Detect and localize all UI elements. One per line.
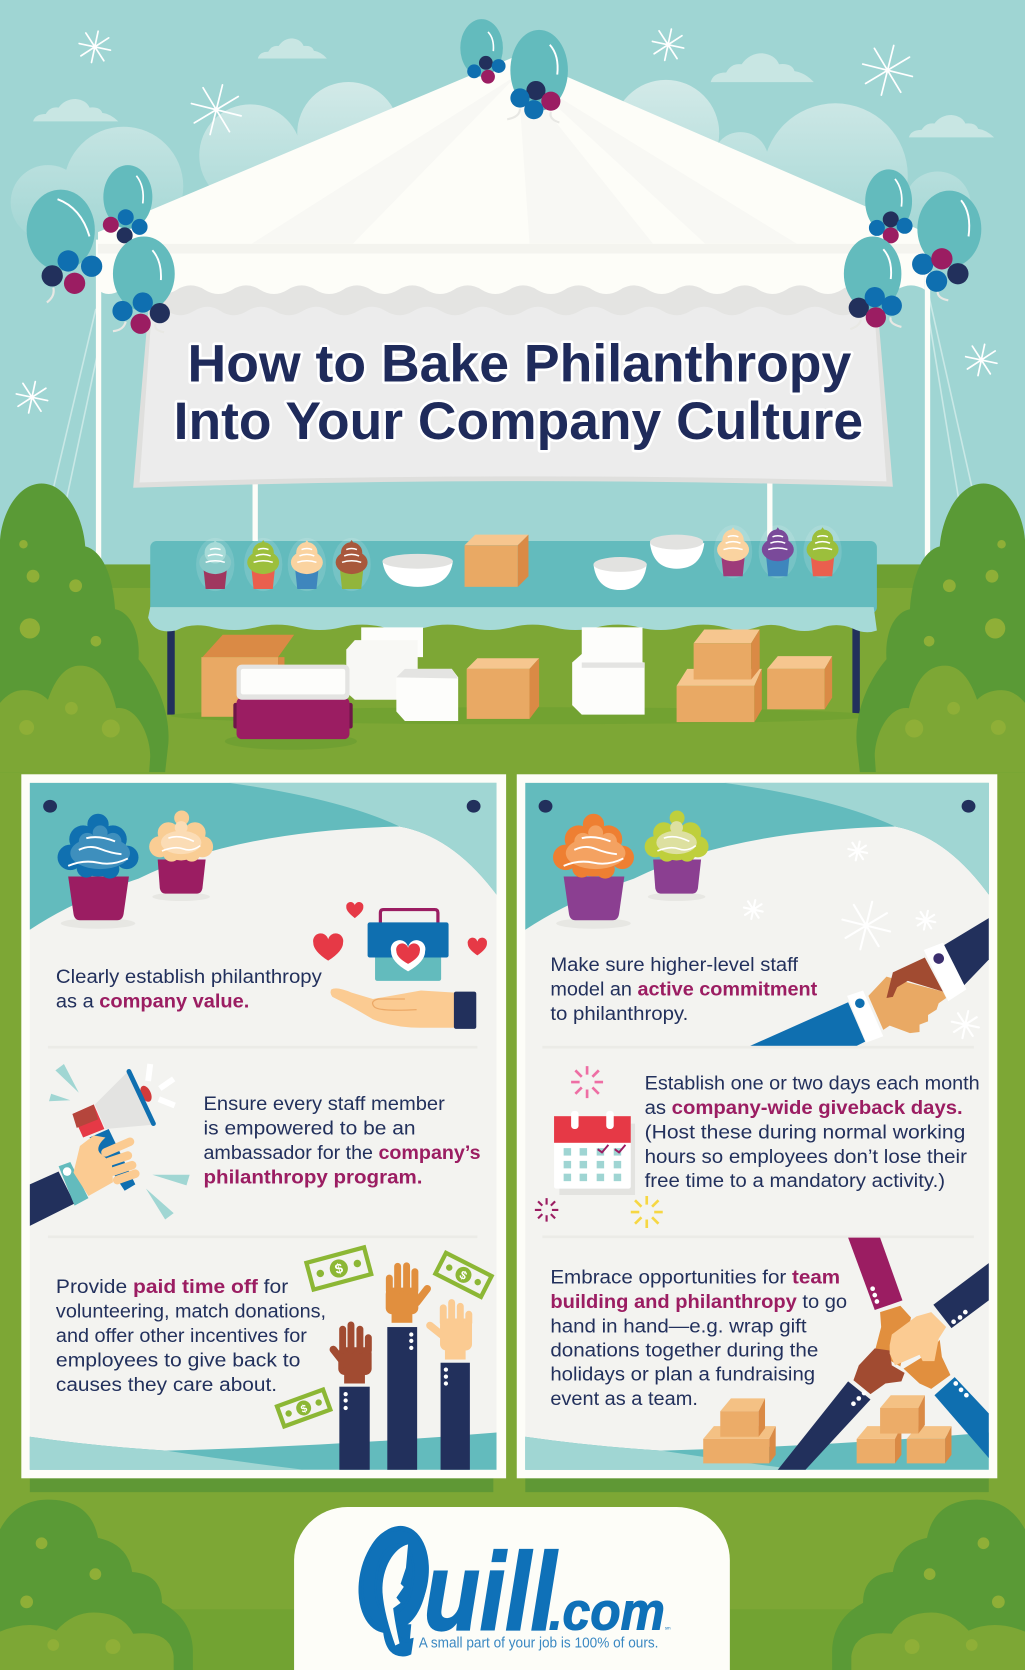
- yellow burst: [631, 1196, 663, 1228]
- text: active commitment: model an active commitment: [550, 978, 818, 1000]
- text: ambassador: philanthropy program.: [204, 1166, 422, 1188]
- cone: [138, 1084, 154, 1104]
- lunchbox: [380, 910, 438, 923]
- calendar: [559, 1124, 635, 1195]
- logo: Quill.com: Q: [358, 1500, 428, 1657]
- text: paid time off: [56, 1276, 326, 1396]
- panel frame: [21, 774, 506, 1478]
- peach hand: [430, 1303, 472, 1360]
- logo: Quill.com: .com: [549, 1583, 665, 1642]
- table: [148, 541, 877, 715]
- hand: [74, 1135, 113, 1196]
- icon: team hands: [778, 1238, 989, 1470]
- table cloth fringe: [148, 607, 877, 632]
- logo: Quill.com: uill: [424, 1532, 558, 1654]
- sleeve buttons: [851, 1286, 969, 1406]
- brown hand: [886, 957, 943, 998]
- text: ambassador: Ensure every staff member: [204, 1093, 445, 1115]
- tent valance: [98, 244, 925, 315]
- navy sleeve: [943, 918, 989, 985]
- text: company value: as a company value.: [56, 991, 249, 1013]
- text: giveback days: as company-wide giveback days.: [645, 1097, 963, 1119]
- panel body: [30, 783, 497, 1470]
- divider: [542, 1235, 974, 1238]
- text: paid time off: causes they care about.: [56, 1374, 277, 1396]
- panel shadows: [30, 1478, 989, 1492]
- arm: [30, 1172, 75, 1226]
- sleeves: [339, 1327, 470, 1470]
- text: company value: [56, 966, 322, 1013]
- pink burst: [571, 1066, 603, 1098]
- text: paid time off: employees to give back to: [56, 1349, 301, 1371]
- title: [174, 334, 863, 451]
- icon: dollar bills: $: [299, 1403, 309, 1416]
- icon: orange cupcake: [553, 814, 634, 929]
- small clouds: [33, 38, 994, 137]
- brown hand: [333, 1325, 372, 1384]
- maroon burst: [535, 1198, 558, 1222]
- divider: [48, 1046, 477, 1049]
- text: team building: event as a team.: [550, 1388, 698, 1410]
- logo tagline: A small part of your job is 100% of ours.: [419, 1636, 658, 1652]
- text: giveback days: (Host these during normal working: [645, 1122, 965, 1144]
- panel: left: [21, 774, 506, 1478]
- large clouds behind tent: [11, 80, 971, 248]
- bushes: lower left: [0, 1500, 193, 1670]
- snowflakes: [13, 26, 1000, 416]
- tent roof: [98, 55, 925, 247]
- logo background: [294, 1507, 730, 1670]
- icon: dollar bills: $: [333, 1259, 345, 1277]
- text: ambassador: ambassador for the company’s: [204, 1142, 481, 1164]
- panel: right: [517, 774, 997, 1478]
- text: giveback days: hours so employees don’t lose their: [645, 1146, 967, 1168]
- text: team building: Embrace opportunities for team: [550, 1266, 840, 1288]
- icon: dollar bills: $: [457, 1268, 469, 1283]
- hand: [331, 988, 455, 1028]
- text: company value: Clearly establish philanthropy: [56, 966, 322, 988]
- icon: blue cupcake: [58, 814, 139, 929]
- banner: [133, 288, 893, 488]
- balloon cluster: top: [460, 19, 568, 122]
- table-top items: [196, 525, 842, 591]
- cuff: [454, 992, 476, 1029]
- balloon cluster: right: [844, 169, 981, 329]
- text: paid time off: Provide paid time off for: [56, 1276, 289, 1298]
- text: paid time off: and offer other incentives for: [56, 1325, 307, 1347]
- logo service mark: sm: [665, 1626, 671, 1631]
- top swoosh: [30, 783, 497, 930]
- bushes: lower right: [832, 1500, 1025, 1670]
- text: team building: donations together during the: [550, 1339, 818, 1361]
- orange hand right: [904, 1340, 950, 1389]
- text: team building: [550, 1266, 847, 1410]
- pins: [539, 800, 975, 813]
- panel body: [525, 783, 989, 1470]
- logo: Quill.com: [349, 1500, 665, 1657]
- divider: [48, 1235, 477, 1238]
- bushes: upper right: [856, 484, 1025, 772]
- tent poles: [96, 240, 930, 564]
- cardboard boxes: [467, 629, 832, 722]
- text: team building: hand in hand—e.g. wrap gift: [550, 1315, 807, 1337]
- box on table: [465, 535, 528, 587]
- ground: [0, 564, 1025, 1670]
- icon: raised hands: [333, 1266, 472, 1470]
- balloon cluster: left: [27, 165, 175, 334]
- table legs: [167, 628, 860, 715]
- text: giveback days: [645, 1073, 980, 1192]
- mini cupcakes: [196, 525, 842, 591]
- orange hand: [868, 977, 946, 1033]
- text: active commitment: [550, 954, 818, 1025]
- text: team building: holidays or plan a fundraising: [550, 1363, 815, 1385]
- hearts: [313, 902, 487, 961]
- cooler: [225, 665, 357, 750]
- open cardboard box: [201, 635, 294, 717]
- bottom swoosh: [30, 1432, 497, 1470]
- bottom swoosh: [525, 1432, 989, 1470]
- icon: stacked boxes left: [703, 1398, 776, 1463]
- text: active commitment: to philanthropy.: [550, 1003, 688, 1025]
- logo Q bowl: [349, 1519, 438, 1648]
- handle: [90, 1129, 135, 1191]
- icon: stacked boxes right: [857, 1395, 951, 1463]
- text: team building: building and philanthropy to go: [550, 1291, 847, 1313]
- icon: peach cupcake: [149, 811, 213, 901]
- pins: [43, 800, 481, 813]
- icon: handshake: [750, 918, 989, 1046]
- bowls: [383, 535, 704, 590]
- title: How to Bake Philanthropy: [188, 334, 852, 393]
- under-table boxes: [201, 627, 832, 750]
- text: paid time off: volunteering, match donations,: [56, 1300, 326, 1322]
- top swoosh: [525, 783, 989, 930]
- white cuffs: [847, 990, 883, 1043]
- sound rays: [49, 1064, 190, 1219]
- logo panel: [294, 1500, 730, 1670]
- brown hand: [853, 1348, 905, 1394]
- peach hand: [890, 1312, 946, 1365]
- orange hand top: [875, 1306, 911, 1366]
- guy wires: [48, 288, 975, 511]
- divider: [542, 1046, 974, 1049]
- under-table shadow: [170, 707, 874, 724]
- cuff: [59, 1162, 88, 1206]
- icon: green cupcake: [645, 811, 709, 901]
- bushes: upper left: [0, 484, 169, 772]
- icon: hand holding lunchbox: [313, 902, 487, 1029]
- icon: quill feather: [382, 1544, 408, 1646]
- white boxes: [346, 627, 645, 721]
- sky background: [0, 0, 1025, 564]
- text: active commitment: Make sure higher-level staff: [550, 954, 799, 976]
- icon: dollar bills: [277, 1247, 492, 1426]
- snowflakes: [742, 840, 982, 1041]
- text: giveback days: Establish one or two days each month: [645, 1073, 980, 1095]
- panel frame: [517, 774, 997, 1478]
- table top: [150, 541, 877, 613]
- text: ambassador: [204, 1093, 481, 1188]
- title: Into Your Company Culture: [174, 392, 863, 451]
- icon: megaphone with hand: [30, 1064, 190, 1226]
- blue sleeve: [750, 1002, 865, 1046]
- icon: calendar with bursts: [535, 1066, 663, 1228]
- text: ambassador: is empowered to be an: [204, 1117, 416, 1139]
- orange hand: [386, 1266, 427, 1323]
- balloons: [27, 19, 981, 334]
- text: giveback days: free time to a mandatory activity.): [645, 1170, 945, 1192]
- sleeves: [848, 1238, 902, 1310]
